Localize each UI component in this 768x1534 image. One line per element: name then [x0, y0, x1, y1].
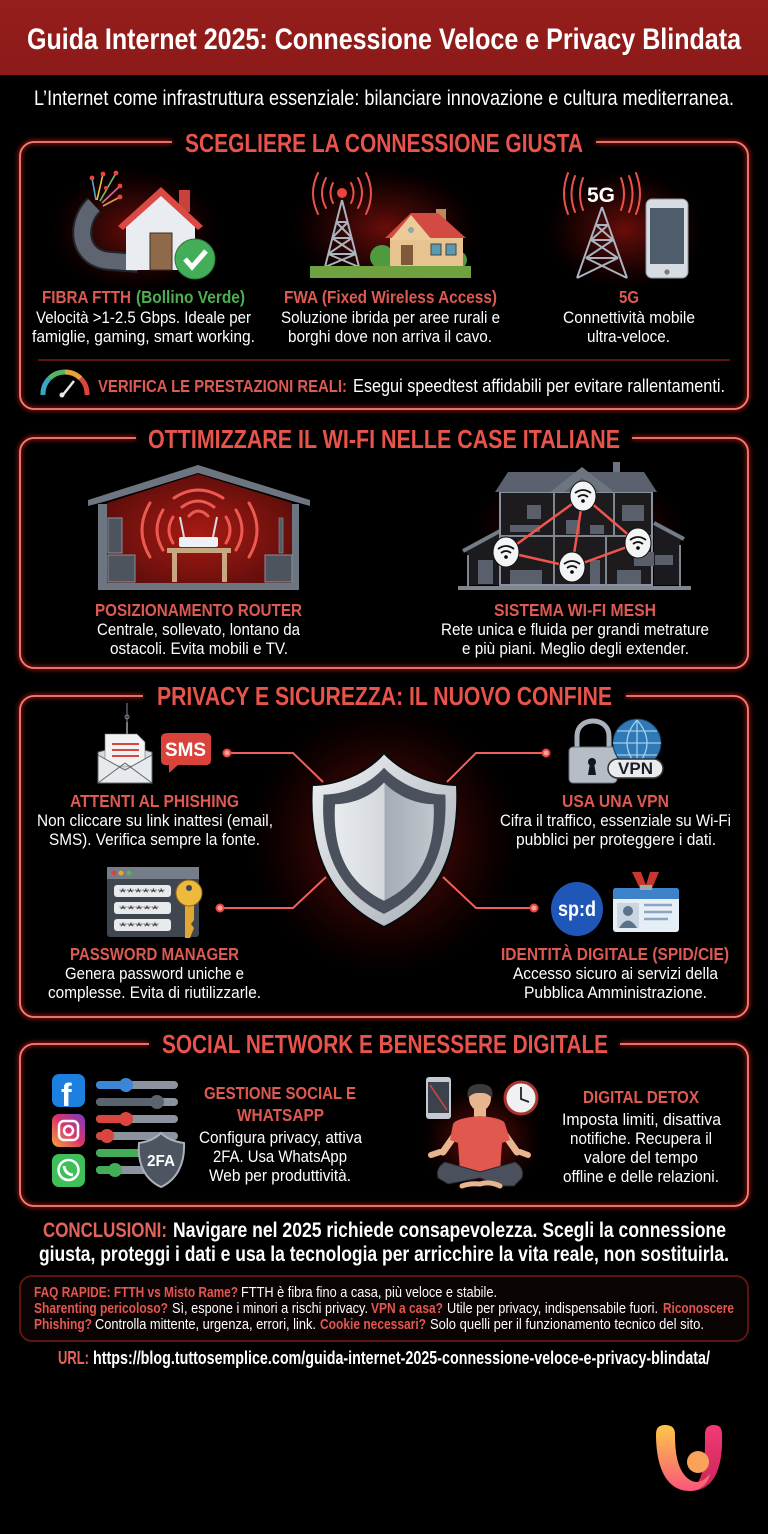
callout: verifica prestazioni: [43, 372, 725, 398]
panel: FAQ rapide: Utile per privacy, indispensabile fuori.: [447, 1300, 658, 1317]
panel: FAQ rapide: FTTH è fibra fino a casa, più veloce e stabile.: [241, 1284, 497, 1301]
text block: identità digitale: [501, 943, 729, 1002]
text block: digital detox: Imposta limiti, disattiva: [562, 1110, 722, 1129]
text block: digital detox: notifiche. Recupera il: [570, 1129, 712, 1148]
text block: gestione social: [199, 1083, 362, 1185]
text block: fibra: Velocità >1-2.5 Gbps. Ideale per: [36, 308, 251, 327]
text block: gestione social: GESTIONE SOCIAL E: [204, 1083, 356, 1103]
heading: PRIVACY E SICUREZZA: IL NUOVO CONFINE: [157, 681, 612, 711]
heading: SCEGLIERE LA CONNESSIONE GIUSTA: [185, 128, 583, 158]
text block: password manager: [48, 944, 261, 1002]
text block: fibra: famiglie, gaming, smart working.: [32, 327, 255, 346]
icon: 5G tower and phone: [545, 170, 705, 290]
conclusioni: [39, 1219, 729, 1266]
text block: posizionamento router: ostacoli. Evita mobili e TV.: [110, 639, 288, 658]
central shield with connectors: [216, 705, 550, 975]
text block: VPN: Cifra il traffico, essenziale su Wi-Fi: [500, 811, 731, 830]
text block: gestione social: WHATSAPP: [237, 1105, 324, 1125]
text block: digital detox: offline e delle relazioni.: [563, 1167, 719, 1186]
text block: phishing: ATTENTI AL PHISHING: [70, 791, 239, 811]
panel: FAQ rapide: Riconoscere: [663, 1300, 734, 1317]
text block: phishing: SMS). Verifica sempre la fonte.: [49, 830, 260, 849]
callout: verifica prestazioni: Esegui speedtest affidabili per evitare rallentamenti.: [353, 375, 725, 396]
icon: SPID and CIE badge: sp:d: [558, 898, 596, 921]
text block: VPN: pubblici per proteggere i dati.: [516, 830, 716, 849]
text block: identità digitale: IDENTITÀ DIGITALE (SPID/CIE): [501, 943, 729, 964]
text block: posizionamento router: [95, 600, 302, 658]
heading: OTTIMIZZARE IL WI-FI NELLE CASE ITALIANE: [148, 424, 620, 454]
panel: FAQ rapide: Solo quelli per il funzionamento tecnico del sito.: [430, 1316, 704, 1333]
conclusioni: CONCLUSIONI:: [43, 1219, 167, 1242]
text block: password manager: Genera password uniche e: [65, 964, 244, 983]
text block: sistema wi-fi mesh: Rete unica e fluida per grandi metrature: [441, 620, 709, 639]
text block: FWA: FWA (Fixed Wireless Access): [284, 287, 497, 307]
panel: FAQ rapide: FAQ RAPIDE: FTTH vs Misto Rame?: [34, 1284, 238, 1301]
icon: speed gauge: [43, 372, 87, 398]
text block: phishing: Non cliccare su link inattesi (email,: [37, 811, 273, 830]
text block: VPN: USA UNA VPN: [562, 791, 669, 811]
icon: FWA tower and house: [290, 168, 480, 288]
panel: social network: [20, 1029, 748, 1206]
text block: gestione social: Configura privacy, attiva: [199, 1128, 362, 1147]
icon: password manager: *****: [119, 904, 160, 916]
text block: digital detox: DIGITAL DETOX: [583, 1087, 699, 1107]
icon: wi-fi mesh house: [458, 462, 691, 590]
text block: fibra: FIBRA FTTH: [42, 287, 131, 307]
panel: FAQ rapide: Sì, espone i minori a rischi privacy.: [172, 1300, 368, 1317]
text block: sistema wi-fi mesh: SISTEMA WI-FI MESH: [494, 600, 656, 620]
text block: password manager: complesse. Evita di riutilizzarle.: [48, 983, 261, 1002]
icon: social apps: [52, 1074, 85, 1187]
mesh nodes: [493, 481, 651, 582]
source URL: URL:: [58, 1348, 89, 1368]
text block: identità digitale: Accesso sicuro ai servizi della: [513, 964, 718, 983]
text block: 5G: Connettività mobile: [563, 308, 695, 327]
text block: posizionamento router: Centrale, sollevato, lontano da: [97, 620, 300, 639]
text block: phishing: [37, 791, 273, 849]
text block: posizionamento router: POSIZIONAMENTO ROUTER: [95, 600, 302, 620]
text block: FWA: borghi dove non arriva il cavo.: [288, 327, 492, 346]
text block: digital detox: valore del tempo: [584, 1148, 698, 1167]
text block: 5G: ultra-veloce.: [587, 327, 670, 346]
header bar: [0, 0, 768, 75]
panel: ottimizzare il wi-fi: [20, 424, 748, 668]
text block: VPN: [500, 791, 731, 849]
text block: FWA: Soluzione ibrida per aree rurali e: [281, 308, 500, 327]
text block: gestione social: Web per produttività.: [209, 1166, 351, 1185]
icon: house with router: [88, 465, 310, 590]
panel: scegliere la connessione: [20, 128, 748, 409]
icon: privacy sliders with 2FA shield: [96, 1078, 184, 1187]
icon: privacy sliders with 2FA shield: 2FA: [147, 1153, 175, 1170]
icon: fibre house: [50, 168, 220, 292]
icon: password manager: [107, 867, 202, 938]
icon: meditating person: [420, 1077, 544, 1195]
logo: [656, 1425, 722, 1491]
icon: phishing: [98, 703, 211, 783]
text block: gestione social: 2FA. Usa WhatsApp: [213, 1147, 347, 1166]
text block: 5G: [563, 287, 695, 346]
icon: social apps: f: [61, 1077, 72, 1113]
panel: FAQ rapide: Controlla mittente, urgenza, errori, link.: [95, 1316, 316, 1333]
panel: FAQ rapide: [20, 1276, 748, 1341]
panel: FAQ rapide: Cookie necessari?: [320, 1316, 426, 1333]
text block: sistema wi-fi mesh: e più piani. Meglio degli extender.: [462, 639, 689, 658]
text block: fibra: (Bollino Verde): [136, 287, 245, 307]
text block: identità digitale: Pubblica Amministrazione.: [524, 983, 707, 1002]
icon: password manager: ******: [119, 887, 166, 899]
panel: FAQ rapide: Sharenting pericoloso?: [34, 1300, 168, 1317]
text block: digital detox: [562, 1087, 722, 1186]
icon: VPN lock and globe: VPN: [618, 759, 653, 778]
panel: privacy e sicurezza: [20, 681, 748, 1017]
heading: SOCIAL NETWORK E BENESSERE DIGITALE: [162, 1029, 608, 1059]
text block: password manager: PASSWORD MANAGER: [70, 944, 239, 964]
5G label: 5G: [587, 184, 615, 207]
text block: fibra: [32, 287, 255, 346]
icon: password manager: *****: [119, 921, 160, 933]
icon: SPID and CIE badge: [551, 872, 679, 936]
panel: FAQ rapide: Phishing?: [34, 1316, 92, 1333]
icon: VPN lock and globe: [569, 719, 663, 783]
icon: phishing: SMS: [165, 740, 206, 761]
panel: FAQ rapide: VPN a casa?: [371, 1300, 443, 1317]
text block: sistema wi-fi mesh: [441, 600, 709, 658]
callout: verifica prestazioni: VERIFICA LE PRESTAZIONI REALI:: [98, 376, 347, 396]
text block: 5G: 5G: [619, 287, 639, 307]
text block: FWA: [281, 287, 500, 346]
